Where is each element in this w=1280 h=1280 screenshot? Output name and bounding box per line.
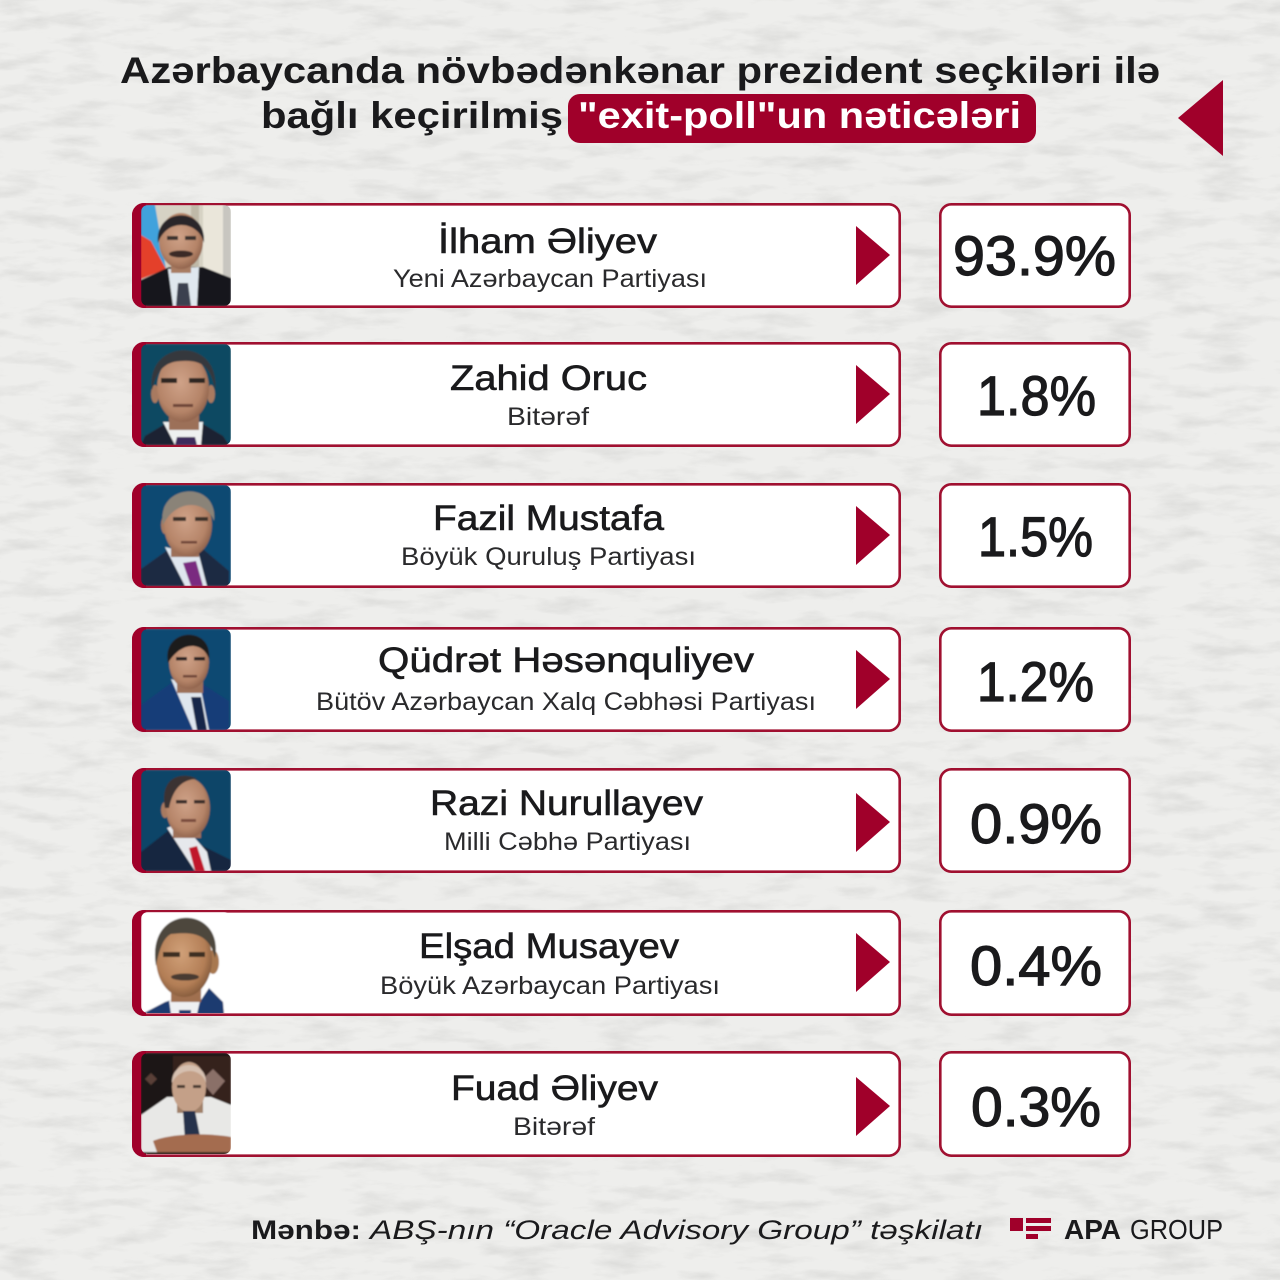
percentage box (940, 484, 1130, 587)
percentage box: 0.4% (970, 934, 1102, 997)
percentage box: 93.9% (953, 224, 1116, 287)
percentage box (940, 911, 1130, 1015)
row 1: İlham Əliyev (132, 203, 1130, 308)
candidate name and party (380, 927, 720, 1000)
candidate name and party (401, 499, 696, 571)
row 4: Qüdrət Həsənquliyev (132, 627, 1130, 732)
portrait: Qüdrət Həsənquliyev (141, 629, 231, 730)
candidate name and party: Bitərəf (513, 1113, 595, 1141)
candidate name and party: Zahid Oruc (450, 359, 647, 398)
APA Group logo (1010, 1214, 1223, 1245)
title (120, 50, 1160, 143)
row 3: Fazil Mustafa (132, 483, 1130, 588)
source line: Mənbə: (251, 1215, 361, 1245)
portrait: İlham Əliyev (141, 205, 231, 306)
percentage box: 1.2% (977, 650, 1094, 713)
portrait: Fuad Əliyev (141, 1053, 231, 1155)
percentage box (940, 204, 1130, 307)
percentage box: 1.8% (977, 364, 1096, 427)
candidate name and party: Böyük Azərbaycan Partiyası (380, 972, 720, 1000)
portrait: Zahid Oruc (141, 344, 231, 445)
percentage box (940, 343, 1130, 446)
portrait: Elşad Musayev (141, 912, 231, 1014)
candidate name and party (393, 222, 707, 293)
percentage box: 0.3% (971, 1075, 1101, 1138)
candidate name and party: Bütöv Azərbaycan Xalq Cəbhəsi Partiyası (316, 688, 816, 716)
candidate name and party: Qüdrət Həsənquliyev (378, 641, 755, 680)
row 6: Elşad Musayev (132, 910, 1130, 1016)
arrow (856, 506, 890, 565)
title: Azərbaycanda növbədənkənar prezident seçkiləri ilə (120, 50, 1160, 91)
arrow (856, 365, 890, 424)
candidate name and party: Razi Nurullayev (430, 784, 704, 823)
percentage box (940, 628, 1130, 731)
candidate name and party (430, 784, 704, 856)
row 7: Fuad Əliyev (132, 1051, 1130, 1157)
percentage box (940, 1052, 1130, 1156)
candidate name and party (451, 1069, 659, 1141)
title highlight pill: "exit-poll"un nəticələri (578, 95, 1021, 136)
portrait: Fazil Mustafa (141, 485, 231, 586)
candidate name and party: Bitərəf (507, 403, 589, 431)
candidate name and party (450, 359, 647, 431)
decorative header triangle (1178, 80, 1223, 156)
title: bağlı keçirilmiş (261, 95, 563, 136)
arrow (856, 650, 890, 709)
arrow (856, 793, 890, 852)
candidate name and party: Böyük Quruluş Partiyası (401, 543, 696, 571)
source line: ABŞ-nın “Oracle Advisory Group” təşkilatı (368, 1215, 983, 1245)
arrow (856, 226, 890, 285)
candidate name and party: Elşad Musayev (419, 927, 680, 966)
row 2: Zahid Oruc (132, 342, 1130, 447)
candidate name and party: Fazil Mustafa (433, 499, 665, 538)
arrow (856, 1077, 890, 1136)
APA Group logo: APA (1064, 1214, 1121, 1245)
source line (251, 1215, 983, 1245)
arrow (856, 933, 890, 992)
portrait: Razi Nurullayev (141, 770, 231, 871)
candidate name and party: Milli Cəbhə Partiyası (444, 828, 691, 856)
candidate name and party: İlham Əliyev (438, 222, 658, 261)
candidate name and party: Yeni Azərbaycan Partiyası (393, 265, 707, 293)
percentage box: 1.5% (978, 505, 1093, 568)
candidate name and party (316, 641, 816, 716)
APA Group logo: GROUP (1130, 1214, 1223, 1245)
percentage box (940, 769, 1130, 872)
percentage box: 0.9% (970, 792, 1102, 855)
candidate name and party: Fuad Əliyev (451, 1069, 659, 1108)
row 5: Razi Nurullayev (132, 768, 1130, 873)
